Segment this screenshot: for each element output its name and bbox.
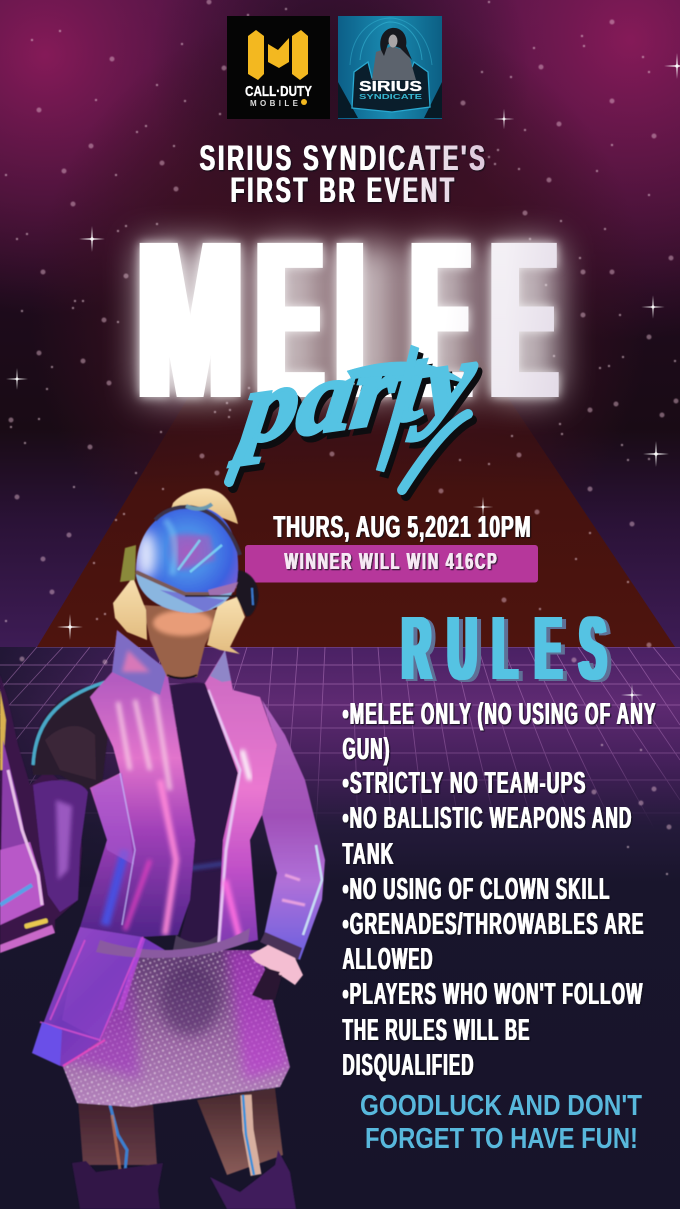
character illustration xyxy=(0,489,325,1209)
background: glowing floor xyxy=(0,647,680,1209)
jacket right panel xyxy=(205,650,277,950)
title: MELEE: L xyxy=(338,195,391,445)
logo: Call of Duty Mobile: CALL·DUTY xyxy=(245,83,312,100)
title: party script: party xyxy=(228,320,483,467)
title: MELEE: L xyxy=(338,195,391,445)
logo: Sirius Syndicate: SIRIUS xyxy=(359,78,422,95)
rules list: DISQUALIFIED xyxy=(342,1048,474,1082)
rules list: THE RULES WILL BE xyxy=(342,1013,530,1047)
right sleeve xyxy=(260,700,325,960)
rules list: ALLOWED xyxy=(342,942,433,976)
heading: event name xyxy=(199,139,487,210)
jacket tails xyxy=(32,927,170,1067)
rules list: TANK xyxy=(342,837,394,871)
helmet visor xyxy=(120,504,240,615)
shirt xyxy=(170,683,250,955)
neck and necklace xyxy=(143,605,222,678)
boots xyxy=(72,1150,296,1209)
background: maroon pyramid xyxy=(37,147,675,647)
legs xyxy=(78,1088,283,1175)
sequin skirt xyxy=(60,928,290,1110)
left arm xyxy=(32,682,112,912)
text: E xyxy=(492,195,555,445)
title: MELEE xyxy=(138,195,558,445)
perspective grid xyxy=(0,647,680,830)
date line: THURS, AUG 5,2021 10PM xyxy=(273,509,531,544)
rules list: GUN) xyxy=(342,732,390,766)
star field xyxy=(6,2,676,874)
text: E xyxy=(492,195,555,445)
logo: Sirius Syndicate: SYNDICATE xyxy=(359,92,422,101)
logo: Call of Duty Mobile: MOBILE xyxy=(250,99,299,108)
sparkle stars xyxy=(6,53,680,706)
prize banner xyxy=(245,545,538,582)
background: starry gradient sky xyxy=(0,0,680,650)
title: MELEE: E xyxy=(258,195,321,445)
logo: Sirius Syndicate xyxy=(338,16,442,119)
headset xyxy=(185,570,258,616)
heading: event name: FIRST BR EVENT xyxy=(230,171,456,210)
closing message xyxy=(360,1090,642,1155)
heading: RULES: RULES xyxy=(402,597,606,698)
weapon xyxy=(0,675,82,953)
hair xyxy=(113,489,245,654)
title: party script: party xyxy=(232,326,487,473)
title: MELEE: E xyxy=(413,195,469,445)
title: MELEE: M xyxy=(138,195,242,445)
heading: RULES: RULES xyxy=(406,599,610,700)
hand xyxy=(250,945,303,1000)
heading: event name: SIRIUS SYNDICATE'S xyxy=(199,139,487,178)
title: MELEE: M xyxy=(138,195,242,445)
title: MELEE: E xyxy=(258,195,321,445)
rules list xyxy=(342,697,656,1082)
logo: Call of Duty Mobile xyxy=(227,16,330,119)
jacket left panel xyxy=(80,630,195,937)
prize banner: WINNER WILL WIN 416CP xyxy=(284,548,498,574)
title: MELEE: E xyxy=(413,195,469,445)
